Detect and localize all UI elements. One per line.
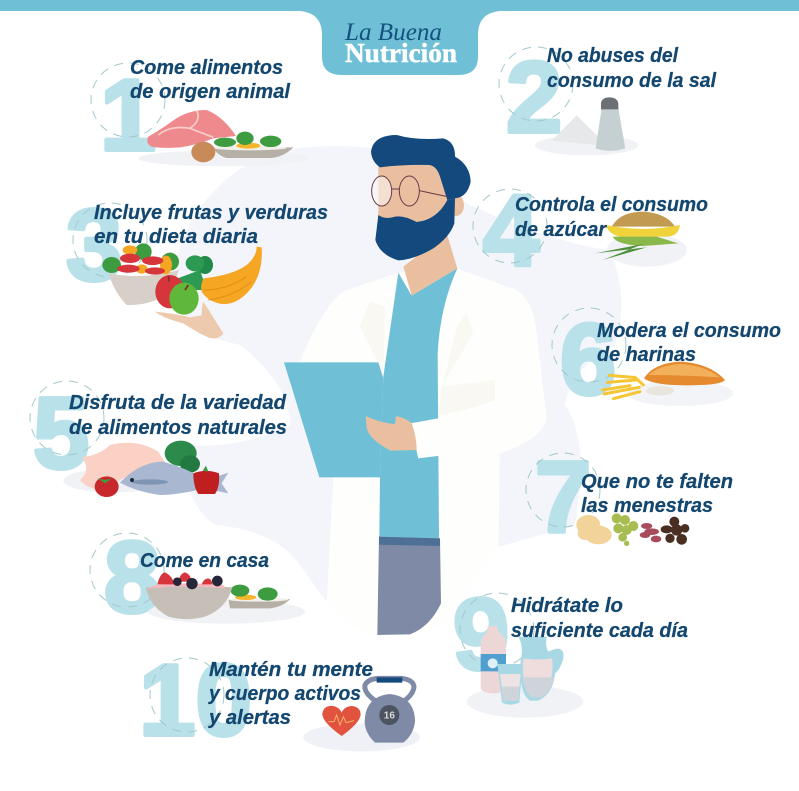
number 9: 9 (453, 579, 509, 691)
number 2: 2 (506, 42, 562, 154)
logo text: Nutrición: Nutrición (345, 38, 457, 68)
number 5: 5 (33, 378, 89, 490)
clipboard (284, 362, 383, 477)
kettlebell weight label: 16 (384, 711, 395, 722)
text: Modera el consumo (597, 320, 781, 342)
dashed circle (552, 308, 626, 382)
text: y cuerpo activos (208, 683, 361, 705)
icon: chicken, fish and vegetables (63, 441, 228, 497)
text: de harinas (597, 344, 696, 366)
beard (375, 198, 455, 260)
trousers (377, 537, 441, 635)
glasses (372, 176, 447, 206)
dashed circle (499, 47, 573, 121)
tip 4 (473, 175, 708, 287)
number 7: 7 (535, 442, 591, 554)
icon: legumes (576, 513, 689, 546)
text: de alimentos naturales (69, 417, 287, 439)
text: Come alimentos (130, 57, 283, 79)
logo text: La Buena: La Buena (344, 19, 442, 46)
text: Que no te falten (581, 471, 733, 493)
text: consumo de la sal (547, 70, 716, 92)
tip 10 (139, 645, 420, 757)
coat shading (360, 302, 495, 415)
tip 2 (499, 42, 716, 155)
icon: sugar bowl (595, 212, 687, 267)
trouser waistband (379, 537, 440, 546)
text: suficiente cada día (511, 620, 688, 642)
number 8: 8 (104, 522, 160, 634)
dashed circle (150, 658, 224, 732)
tip 5 (30, 378, 287, 497)
icon: heart and kettlebell (303, 677, 420, 751)
text: Controla el consumo (515, 194, 708, 216)
text: de origen animal (130, 81, 290, 103)
dashed circle (526, 453, 600, 527)
hair (371, 135, 471, 200)
text: de azúcar (515, 219, 607, 241)
doctor illustration (284, 135, 547, 637)
icon: meat and plate (138, 110, 308, 166)
dashed circle (473, 189, 547, 263)
text: las menestras (581, 495, 713, 517)
text: y alertas (208, 707, 291, 729)
background blob (172, 146, 621, 600)
dashed circle (91, 63, 165, 137)
text: No abuses del (547, 45, 678, 67)
number 4: 4 (483, 175, 539, 287)
text: Incluye frutas y verduras (94, 202, 328, 224)
icon: fruit bowl and plate (146, 572, 305, 624)
face (378, 163, 454, 233)
tip 6 (552, 304, 781, 416)
icon: salad, fruit and hand (102, 243, 262, 339)
dashed circle (460, 593, 534, 667)
text: en tu dieta diaria (94, 226, 258, 248)
text: Mantén tu mente (209, 659, 373, 681)
coat (290, 268, 547, 637)
logo tab (300, 11, 500, 75)
tip 9 (453, 579, 688, 718)
tip 1 (91, 57, 308, 172)
hand (366, 416, 417, 451)
icon: water bottle, jug and glass (467, 626, 583, 718)
sleeve (410, 333, 547, 458)
neck (403, 233, 457, 296)
icon: salt shaker (535, 97, 638, 155)
number 10: 10 (139, 645, 252, 757)
number 6: 6 (560, 304, 616, 416)
tip 8 (90, 522, 305, 634)
number 3: 3 (66, 190, 122, 302)
dashed circle (73, 203, 147, 277)
number 1: 1 (100, 60, 156, 172)
top bar (0, 0, 799, 11)
dashed circle (30, 381, 104, 455)
ear (448, 195, 464, 216)
text: Hidrátate lo (511, 595, 623, 617)
icon: bread and pasta (603, 362, 733, 406)
text: Come en casa (140, 550, 269, 572)
shirt (379, 268, 457, 538)
text: Disfruta de la variedad (69, 392, 287, 414)
tip 3 (66, 190, 328, 339)
dashed circle (90, 533, 164, 607)
tip 7 (526, 442, 733, 554)
